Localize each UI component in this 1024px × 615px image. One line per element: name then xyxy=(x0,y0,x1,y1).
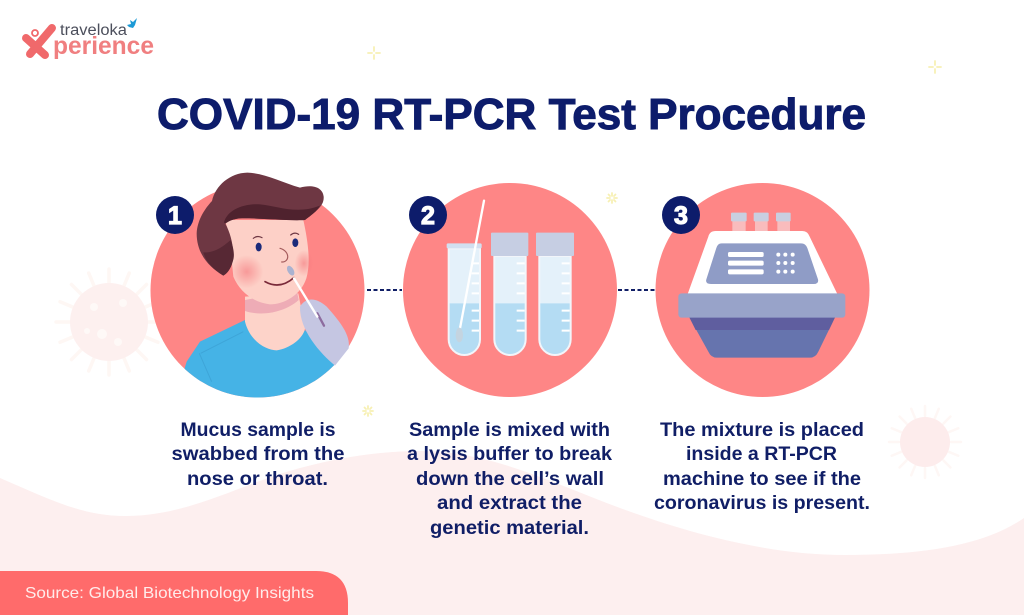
caption: step 1: nose or throat. xyxy=(187,469,328,490)
background wave xyxy=(0,451,1024,615)
caption: step 3: The mixture is placed xyxy=(660,420,864,441)
tube 1 xyxy=(447,201,484,355)
keypad xyxy=(776,253,795,274)
caption: step 1: Mucus sample is xyxy=(180,420,336,441)
number badge 2: 2 xyxy=(421,202,435,230)
sparkles xyxy=(363,47,941,416)
machine base xyxy=(689,317,835,358)
number badge 2 xyxy=(409,196,447,234)
person xyxy=(173,173,349,405)
shirt fold xyxy=(199,332,243,382)
glove crease xyxy=(317,313,324,326)
hair xyxy=(197,173,324,276)
step 2 illustration: test tubes xyxy=(403,183,617,397)
caption: step 3: inside a RT-PCR xyxy=(686,444,837,465)
caption: step 2: Sample is mixed with xyxy=(409,420,610,441)
sample tubes on top xyxy=(731,213,791,232)
logo: Traveloka Xperience xyxy=(26,18,154,60)
swab tip xyxy=(285,265,296,277)
logo word: traveloka: traveloka xyxy=(60,22,127,39)
glove xyxy=(300,300,349,366)
caption: step 3: machine to see if the xyxy=(663,469,861,490)
number badge 1: 1 xyxy=(168,202,182,230)
face xyxy=(225,220,309,304)
machine band xyxy=(678,293,845,318)
caption: step 2: genetic material. xyxy=(430,518,589,539)
title: COVID-19 RT-PCR Test Procedure xyxy=(157,90,866,139)
connector: step 1 to 2 xyxy=(367,289,402,291)
caption: step 2: and extract the xyxy=(437,493,582,514)
logo word: perience: perience xyxy=(53,32,154,60)
step 3 illustration: RT-PCR machine xyxy=(656,183,870,397)
circle background 2 xyxy=(403,183,617,397)
hair shadow xyxy=(203,240,234,276)
logo mark: X xyxy=(26,28,52,55)
machine lid xyxy=(688,231,837,294)
cheeks xyxy=(230,255,263,288)
number badge 3: 3 xyxy=(674,202,688,230)
caption: step 3 xyxy=(654,420,870,514)
caption: step 2: down the cell’s wall xyxy=(416,469,604,490)
source bar xyxy=(0,571,348,615)
tube 3 xyxy=(536,233,574,355)
display lines xyxy=(728,252,764,274)
hair dark strip xyxy=(224,204,320,224)
source text: Source: Global Biotechnology Insights xyxy=(25,585,314,602)
caption: step 3: coronavirus is present. xyxy=(654,493,870,514)
swab stick xyxy=(294,278,317,317)
caption: step 2 xyxy=(407,420,612,539)
base shadow band xyxy=(689,317,835,330)
neck shadow xyxy=(245,290,299,313)
caption: step 2: a lysis buffer to break xyxy=(407,444,612,465)
circle background 3 xyxy=(656,183,870,397)
control panel xyxy=(706,243,818,284)
caption: step 1 xyxy=(172,420,344,490)
circle background 1 xyxy=(150,184,364,398)
logo bird xyxy=(127,18,137,28)
connector: step 2 to 3 xyxy=(618,289,655,291)
cheek right xyxy=(295,250,313,277)
number badge 1 xyxy=(156,196,194,234)
neck xyxy=(245,293,305,350)
decorative virus left xyxy=(56,269,162,375)
tube 2 xyxy=(491,233,528,355)
caption: step 1: swabbed from the xyxy=(172,444,344,465)
decorative virus right xyxy=(889,406,961,478)
eyes xyxy=(256,238,298,251)
brows, nose and mouth xyxy=(253,233,299,285)
step 1 illustration: nose swab xyxy=(150,173,364,405)
number badge 3 xyxy=(662,196,700,234)
shirt xyxy=(184,320,334,398)
